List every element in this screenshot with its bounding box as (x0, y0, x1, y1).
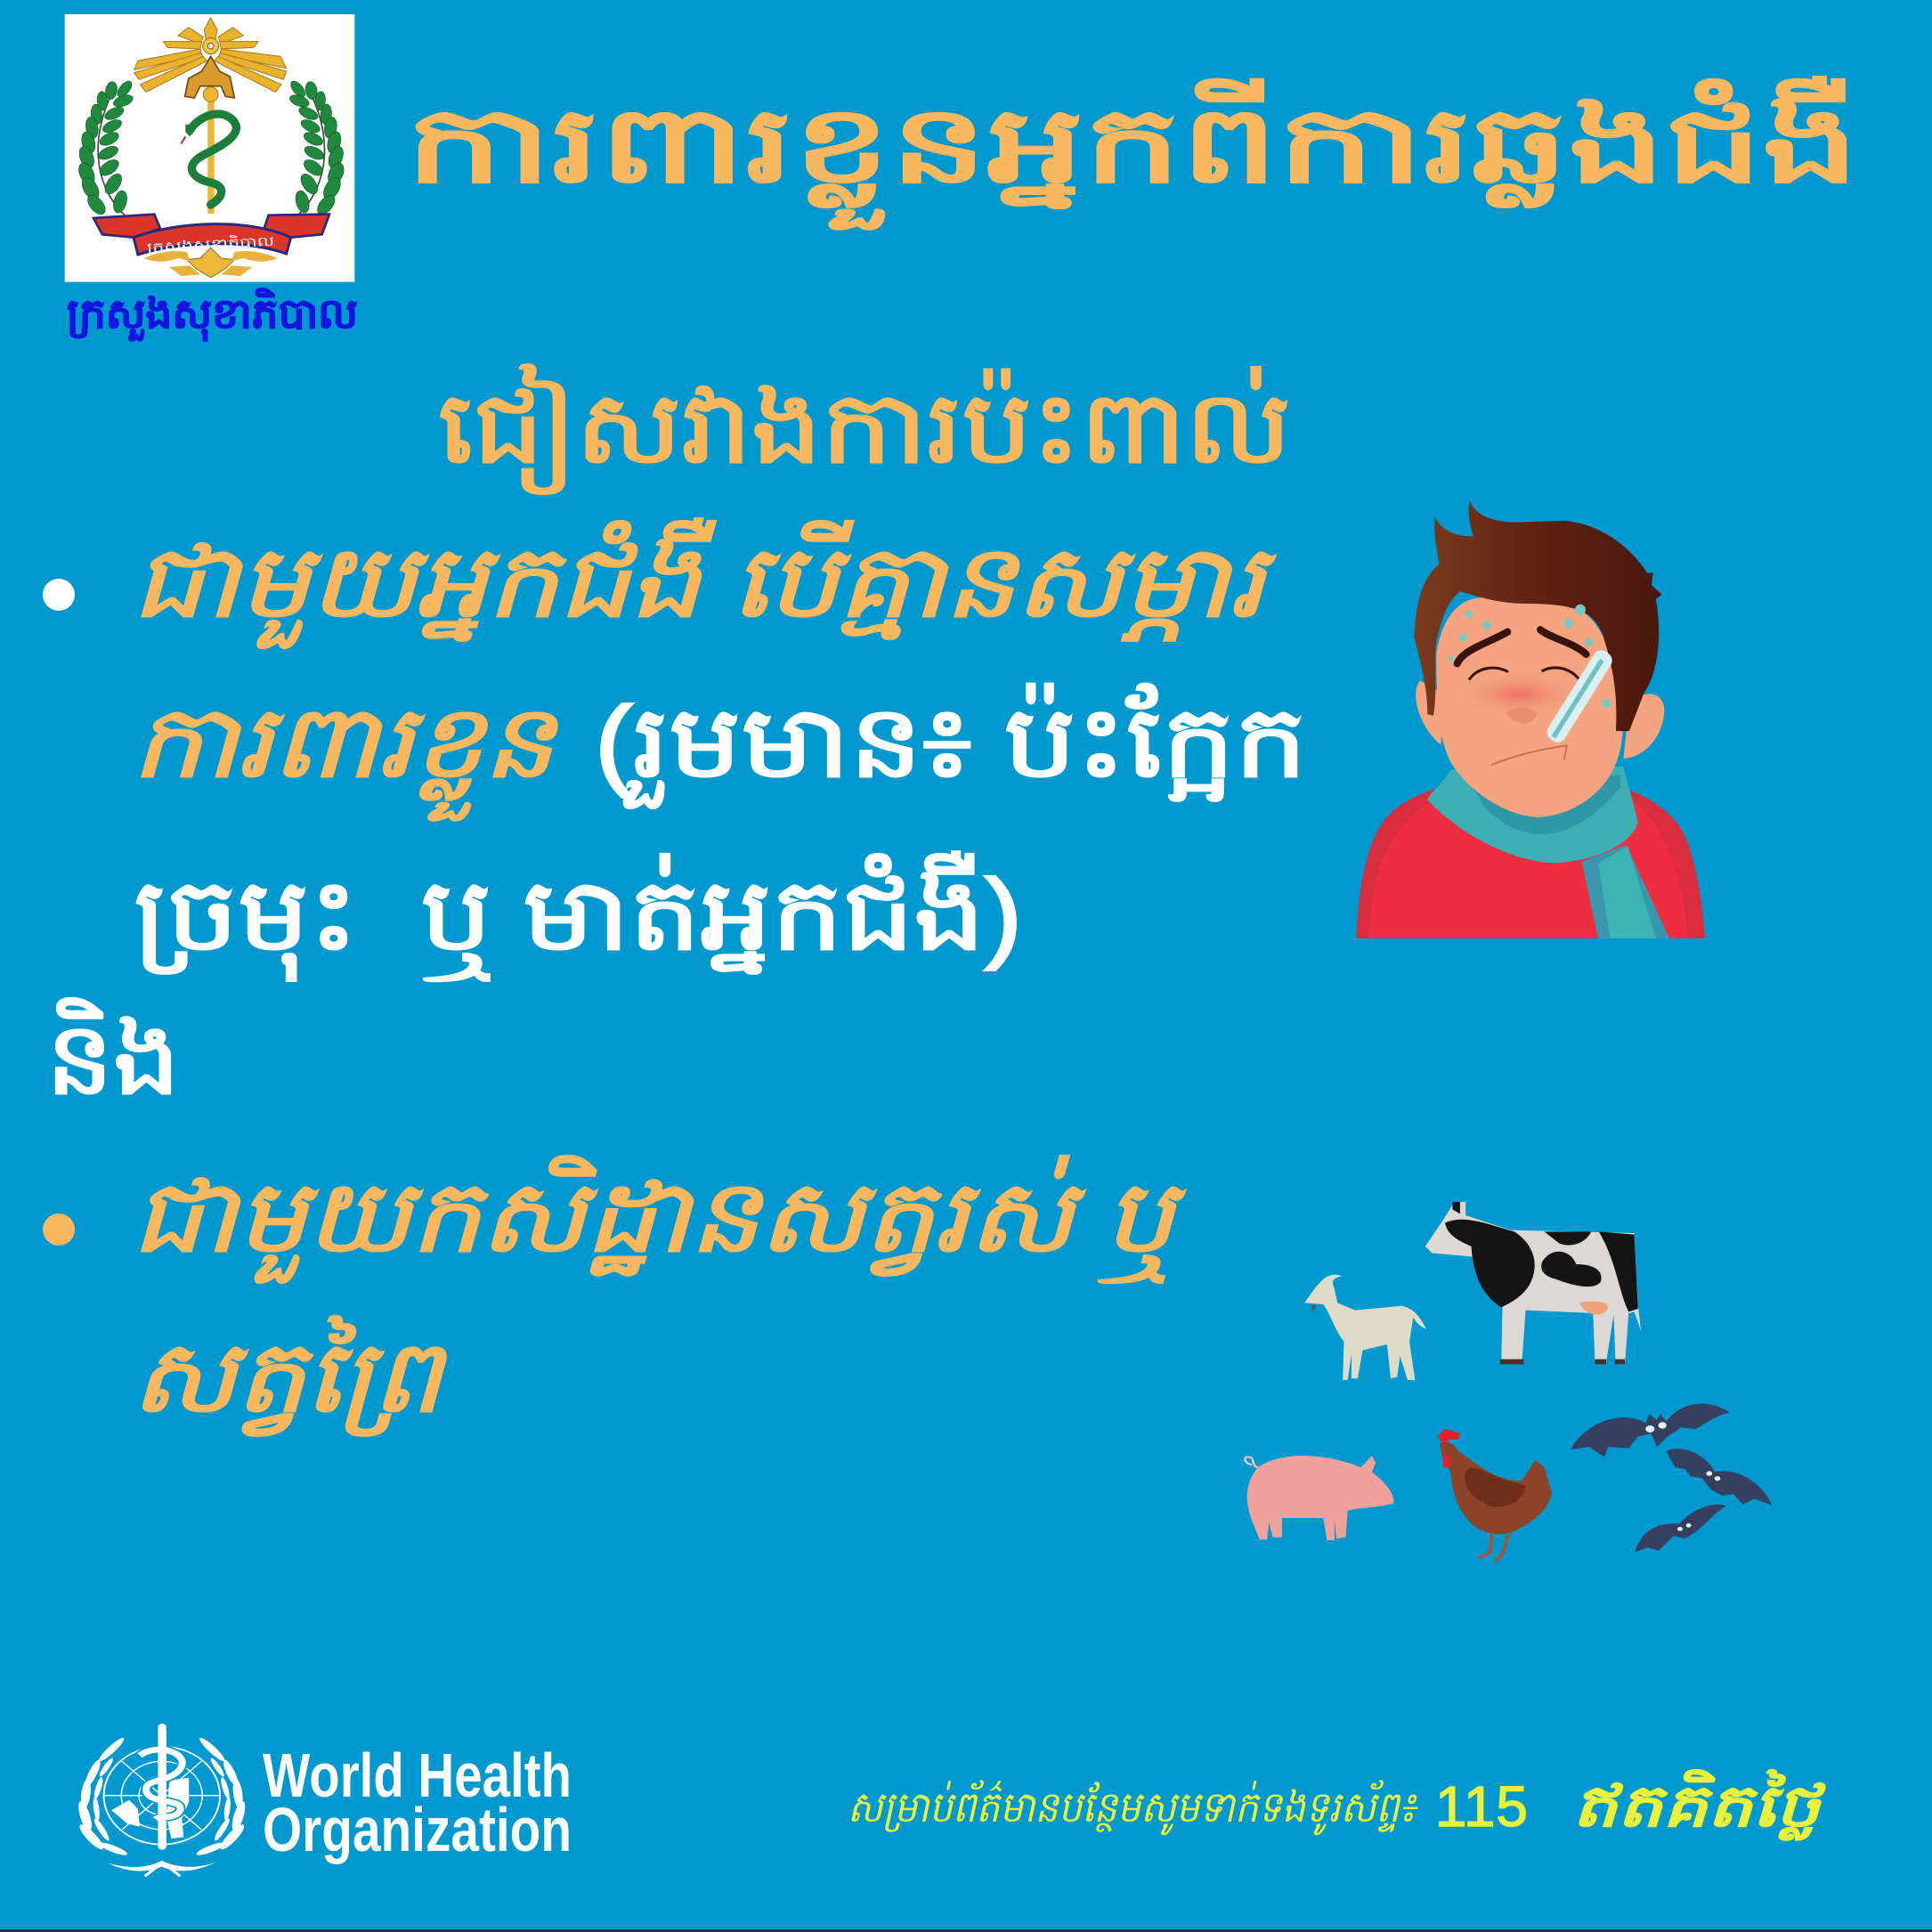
bullet item 2: live animal farms or wild animals (43, 1156, 1185, 1436)
hotline number: 115 (1435, 1774, 1528, 1839)
illustration: animals (1245, 1202, 1772, 1563)
logo: World Health Organization emblem (76, 1724, 248, 1876)
eyebrows (1457, 632, 1507, 663)
ears (1416, 680, 1445, 745)
bat small (1635, 1505, 1726, 1552)
logo: Ministry of Health emblem (65, 14, 354, 282)
line 2: សត្វព្រៃ (132, 1316, 449, 1436)
title: ការពារខ្លួនអ្នកពីការឆ្លងជំងឺ (406, 77, 1859, 229)
logo text: World Health Organization: Organization (263, 1795, 572, 1864)
thermometer (1544, 647, 1615, 745)
subheading: ជៀសវាងការប៉ះពាល់ (438, 364, 1291, 494)
sweater (1356, 785, 1705, 938)
rooster (1440, 1442, 1552, 1534)
laurel right (288, 78, 347, 217)
logo text: World Health Organization (263, 1741, 572, 1864)
connector word: and: និង (46, 998, 180, 1115)
bat large (1571, 1403, 1730, 1457)
line 1: ជាមួយកសិដ្ឋានសត្វរស់ ឬ (132, 1156, 1185, 1283)
hair (1414, 500, 1662, 731)
line 2 orange: ការពារខ្លួន (132, 686, 561, 821)
bullet dot white (43, 579, 75, 611)
free of charge: ឥតគិតថ្លៃ (1572, 1770, 1826, 1840)
staff (207, 95, 215, 214)
line 3: ច្រមុះ ឬ មាត់អ្នកជំងឺ) (134, 851, 1022, 981)
face (1436, 597, 1623, 817)
rays (134, 18, 287, 92)
continents (111, 1800, 140, 1827)
snake (190, 114, 236, 205)
line 2 white: (រួមមាន៖ ប៉ះក្អែក (595, 684, 1307, 808)
snake (140, 1749, 183, 1819)
logo: Ministry of Health emblem: ក្រសួងសុខាភិបាល (147, 233, 275, 256)
staff (158, 1724, 166, 1850)
eyes (1469, 668, 1508, 680)
ribbon (93, 215, 160, 238)
logo caption: ministry name: ក្រសួងសុខាភិបាល (67, 288, 358, 342)
laurel left (76, 78, 134, 217)
bullet item 1: contact with sick people (43, 518, 1307, 981)
hotline label: សម្រាប់ព័ត៌មានបន្ថែមសូមទាក់ទងទូរស័ព្ទ៖ (848, 1780, 1418, 1836)
pig (1247, 1456, 1393, 1540)
illustration: sick man with thermometer (1356, 500, 1705, 938)
scarf (1582, 845, 1669, 938)
laurels (76, 1736, 129, 1857)
sweat drops (1449, 605, 1611, 709)
goat (1304, 1275, 1426, 1380)
logo text: World Health Organization: World Health (263, 1741, 572, 1810)
cow (1425, 1202, 1641, 1364)
crown (185, 56, 234, 98)
mouth (1491, 745, 1567, 765)
bat middle (1666, 1449, 1772, 1506)
ornament (187, 248, 234, 278)
line 1: ជាមួយអ្នកជំងឺ បើគ្មានសម្ភារ (132, 518, 1275, 648)
blush and nose (1456, 671, 1583, 718)
bullet dot orange (43, 1214, 75, 1246)
footer: hotline (848, 1770, 1826, 1840)
